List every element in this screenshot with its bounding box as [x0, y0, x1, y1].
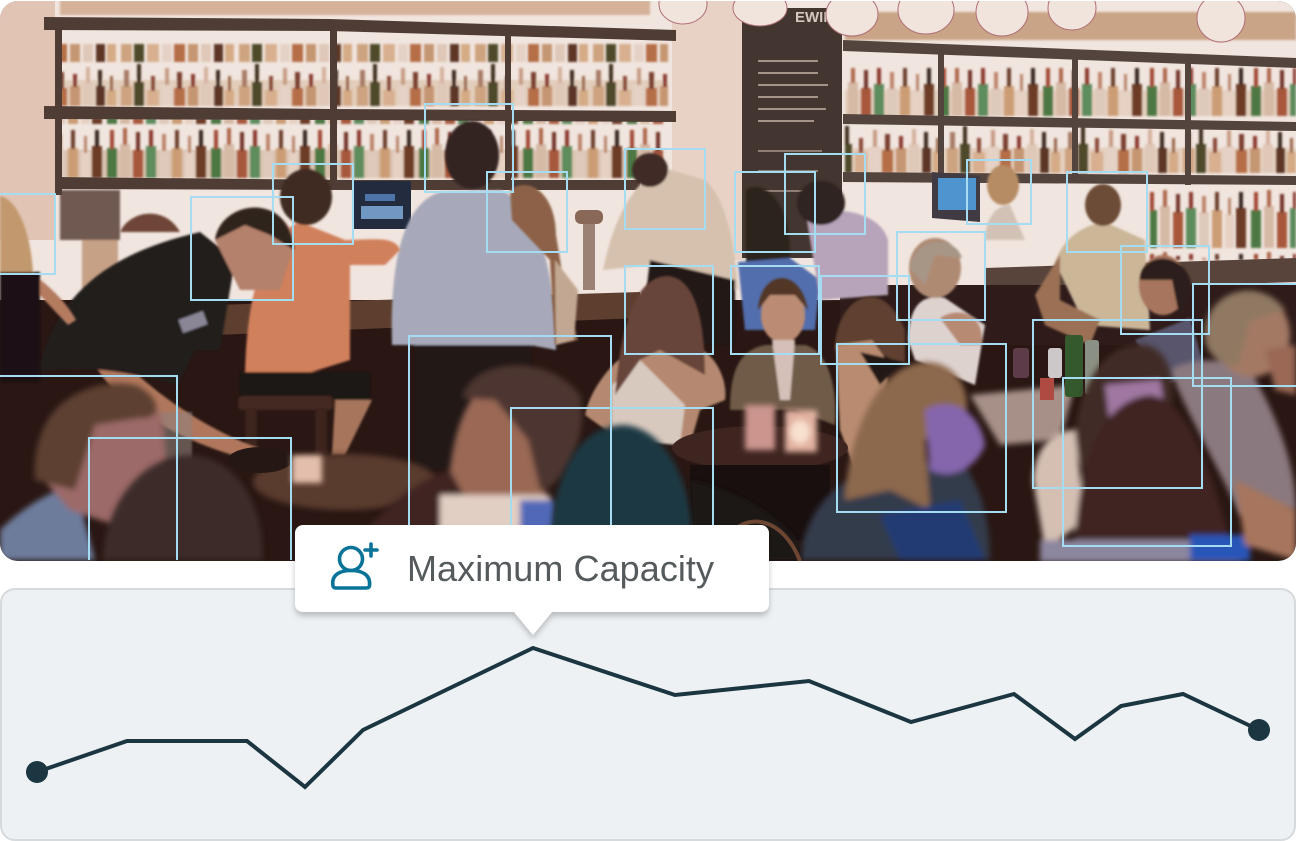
man in tan shirt: [1035, 184, 1150, 345]
man in navy jacket: [1135, 255, 1205, 385]
woman behind the bartender: [510, 185, 578, 345]
end point: [1248, 719, 1270, 741]
foreground head back view: [103, 455, 262, 560]
panel: bar photograph: [0, 0, 1296, 562]
hanging lamps: [659, 0, 1245, 42]
brick column: [672, 0, 744, 260]
callout label: Maximum Capacity: [407, 548, 714, 589]
woman laughing: [730, 278, 835, 425]
wooden table at left: [160, 412, 437, 510]
detection boxes: [0, 104, 1296, 560]
foreground man at left: [0, 383, 170, 560]
bar counters: [215, 292, 640, 335]
waitress at the terminal: [985, 165, 1025, 240]
left shelves: [44, 17, 676, 195]
woman in white tank: [585, 276, 725, 445]
callout: maximum capacity: [295, 525, 769, 635]
icon: person with plus: [333, 544, 377, 588]
chalkboard menu: [742, 8, 842, 258]
man with grey hair and check shirt: [1170, 291, 1296, 515]
older man with white shirt: [908, 238, 985, 385]
terminals and tap: [353, 172, 980, 290]
panel: occupancy chart: [1, 589, 1295, 840]
left brick wall: [0, 0, 55, 240]
woman at far left: [0, 196, 180, 382]
centre round table with candles: [672, 405, 848, 540]
right table with wine bottles: [970, 335, 1099, 445]
foreground woman with teal hair: [548, 420, 694, 525]
woman with ponytail: [835, 297, 905, 470]
back wall tile: [0, 0, 1296, 300]
man in white shirt at the bar: [603, 153, 738, 345]
woman with long hair in foreground: [800, 362, 990, 560]
bartender in blue shirt: [390, 120, 558, 352]
woman and man in lilac shirt: [738, 181, 888, 330]
man in orange shirt: [238, 169, 400, 455]
line series: [37, 648, 1259, 787]
left bottle rows: [58, 0, 1296, 290]
foreground man in centre: [370, 365, 582, 545]
start point: [26, 761, 48, 783]
chalkboard menu: EWIN: [795, 9, 834, 26]
server in black t-shirt: [38, 208, 294, 460]
women on the right in foreground: [1033, 345, 1296, 562]
warm tint over the photo: [0, 0, 1296, 561]
right shelves: [843, 40, 1296, 185]
